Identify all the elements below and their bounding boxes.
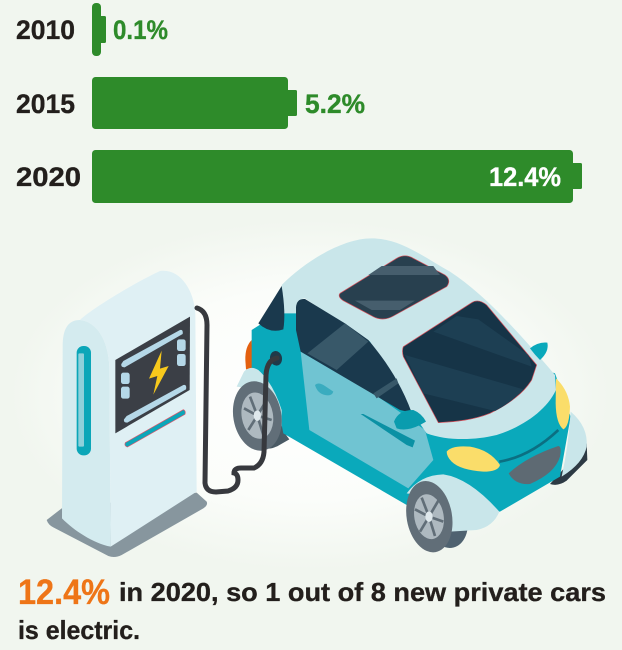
row: 2010: 0.1% [113,15,168,45]
front right tyre tread [550,443,587,485]
row: 2015: 2015 [16,89,75,119]
row: 2020: 2020 [16,162,81,192]
station base shadow [47,493,207,557]
roof and pillars [282,238,556,439]
bar chart: electric share by year [16,3,582,203]
station face [80,271,197,547]
front wheel [401,477,458,556]
row: 2020 [16,150,582,203]
front tyre tread [420,488,474,552]
highlight figure: 12.4% [18,573,110,612]
row: 2010 [16,3,168,56]
door crease [361,414,415,447]
caption text line 2: is electric. [18,615,140,645]
icon: lightning bolt [149,351,169,395]
body shell [252,310,571,512]
icon: charging station [47,271,207,557]
charging cable [197,308,277,492]
screen buttons and bars [121,330,186,423]
windshield [402,301,537,423]
wing mirrors [530,343,548,360]
row: 2010: 2010 [16,15,75,45]
row: 2020: 12.4% [489,162,561,192]
card slot [125,410,185,447]
charging port [269,350,283,367]
caption [18,573,606,645]
headlights [447,446,500,472]
icon: electric car [228,238,587,556]
row: 2015 [16,77,365,129]
side light slot [77,346,91,455]
rear wheel [228,377,287,455]
grille [509,446,561,484]
front right fender [562,412,587,477]
side window [296,299,412,413]
row: 2015: 5.2% [305,89,365,119]
caption text line 1: in 2020, so 1 out of 8 new private cars [119,577,606,607]
door handle [315,384,333,395]
rear fender [237,368,282,427]
rear tyre tread [236,383,294,454]
side door [301,352,433,488]
rear quarter window [258,286,284,331]
rear light [245,340,253,369]
sunroof [339,256,449,319]
screen [115,317,190,433]
station front side [62,320,111,547]
front fender [407,474,499,532]
